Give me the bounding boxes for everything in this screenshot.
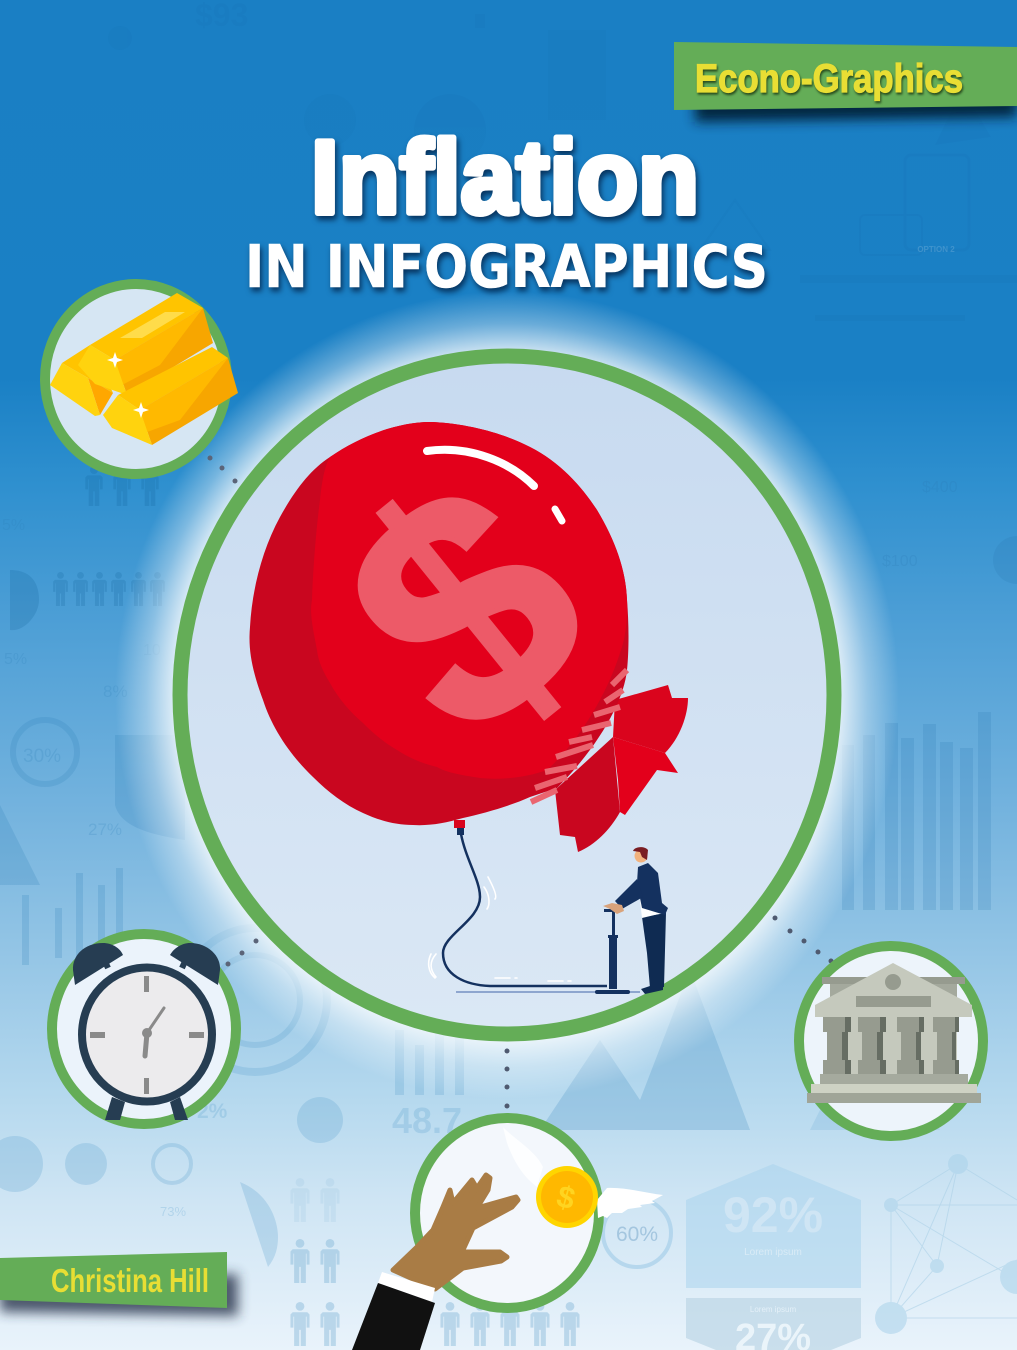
panel: flying coin circle — [352, 1118, 663, 1350]
hand — [603, 903, 624, 914]
shirt — [640, 900, 663, 918]
faint people rows upper left — [10, 466, 165, 630]
faint option label: OPTION 2 — [917, 245, 955, 254]
faint right labels: $100 — [882, 553, 918, 570]
balloon knot tail — [555, 685, 688, 852]
faint 60% gauge: 60% — [616, 1223, 658, 1246]
icon: gold coin: $ — [553, 1178, 579, 1217]
faint 60% gauge — [603, 1199, 671, 1267]
balloon valve — [454, 820, 465, 835]
panel: bank circle — [799, 946, 983, 1136]
motion marks — [429, 877, 571, 981]
icon: right wing — [597, 1188, 663, 1218]
faint left charts — [0, 517, 185, 965]
jacket — [637, 863, 668, 915]
arm — [615, 879, 643, 909]
centre glow — [115, 291, 899, 1099]
dollar sign: $ — [283, 412, 648, 804]
head — [633, 847, 648, 862]
faint 27% panel: Lorem ipsum — [750, 1305, 796, 1314]
faint lower left shapes: 2% — [197, 1100, 228, 1123]
icon: reaching hand — [352, 1175, 518, 1350]
ground line — [456, 991, 640, 993]
faint lower right mountains — [540, 970, 940, 1130]
hose — [443, 834, 607, 986]
faint left charts: 27% — [88, 820, 122, 839]
panel: main circle — [180, 356, 834, 1034]
faint left charts: 5% — [4, 651, 27, 668]
faint 27% panel — [686, 1298, 861, 1350]
rope — [531, 670, 627, 802]
dotted connector: bank — [772, 916, 834, 964]
icon: left wing — [503, 1127, 543, 1187]
panel: gold circle — [45, 284, 238, 474]
icon: bank building — [807, 963, 981, 1103]
balloon highlights — [427, 450, 562, 521]
banner: series name — [674, 42, 1017, 122]
icon: gold bars — [50, 293, 238, 445]
faint lower left shapes — [0, 928, 464, 1267]
faint lower left shapes: 48.7 — [392, 1100, 462, 1141]
dotted connector: clock — [226, 938, 258, 966]
banner: series name: Econo-Graphics — [695, 57, 963, 101]
faint left charts: 8% — [103, 682, 128, 701]
illustration: red dollar balloon — [250, 412, 688, 852]
banner: author — [0, 1252, 238, 1316]
faint left charts: 10 — [143, 642, 161, 659]
icon: gold coin — [536, 1166, 598, 1228]
faint network diagram — [875, 1154, 1017, 1334]
faint 92% panel — [686, 1164, 861, 1288]
balloon body dark side — [250, 422, 629, 825]
faint left charts: 30% — [23, 746, 61, 767]
businessman — [603, 847, 668, 994]
subtitle: IN INFOGRAPHICS — [245, 232, 768, 301]
title — [245, 120, 768, 301]
dotted connector: gold — [208, 456, 238, 484]
dotted connector: coin — [504, 1048, 510, 1108]
faint right labels — [882, 479, 1017, 584]
shoe — [641, 986, 663, 994]
faint left charts: 5% — [2, 517, 25, 534]
faint right labels: $400 — [922, 479, 958, 496]
faint right bar chart — [842, 712, 991, 910]
faint 92% panel: 92% — [723, 1187, 823, 1243]
title word: Inflation: Inflation — [311, 120, 699, 236]
icon: alarm clock — [73, 943, 220, 1120]
faint top shapes — [108, 0, 1017, 321]
trousers — [642, 913, 666, 988]
faint 92% panel: Lorem ipsum — [744, 1247, 802, 1258]
hand pump — [595, 909, 630, 994]
balloon body bright area — [311, 422, 627, 779]
faint lower left shapes: 73% — [160, 1204, 186, 1219]
panel: clock circle — [52, 934, 236, 1124]
banner: author: Christina Hill — [51, 1262, 209, 1299]
faint bottom people rows — [290, 1178, 580, 1346]
